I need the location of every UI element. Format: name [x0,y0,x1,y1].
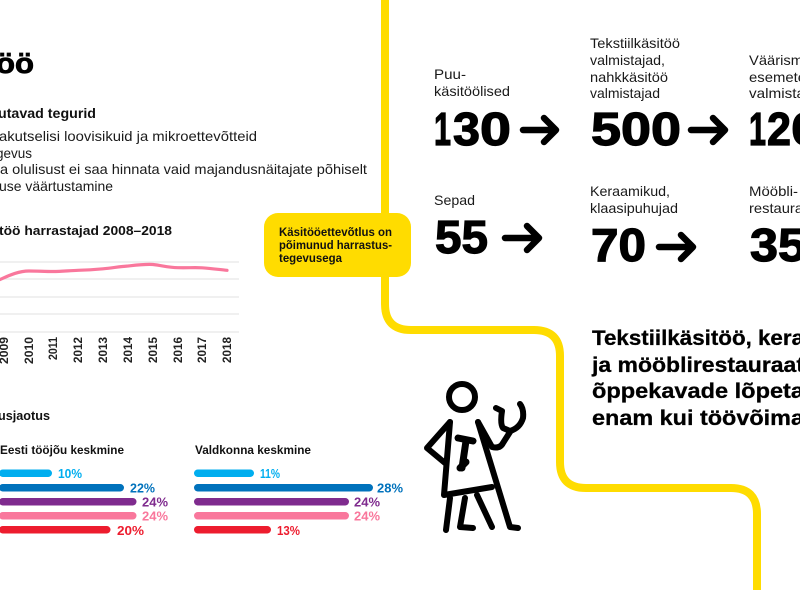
stat: textile and leather makers [590,35,681,155]
year axis labels: 2018 [222,336,234,363]
panel: line chart of hobbyists [0,223,239,364]
bar chart: Estonian workforce average: Eesti tööjõu keskmine [0,443,124,457]
stat: smiths [434,192,488,263]
stat: woodworkers: 3 [453,103,480,155]
stat: woodworkers [434,66,511,155]
arrow [505,226,539,250]
bar chart: Estonian workforce average: 20% [117,524,144,538]
stat: furniture restorers: 35 [750,219,800,271]
callout: põimunud harrastus- [279,240,392,252]
bar chart: sector average: 24% [354,510,380,524]
text block: conclusion [591,326,800,430]
arrow [523,118,556,142]
stat: furniture restorers [749,183,800,271]
callout: Käsitööettevõtlus on [279,227,392,239]
text block: conclusion: ja mööblirestauraat [591,353,800,377]
stat: precious metal makers: 2 [767,103,791,155]
stat: smiths: Sepad [434,192,475,208]
stat: precious metal makers: Väärism [749,52,800,68]
panel: influencing factors [0,106,367,194]
panel: distribution bars [0,408,403,538]
bar chart: Estonian workforce average: 24% [142,510,168,524]
text block: factors list [0,128,367,194]
text block: conclusion: õppekavade lõpeta [592,379,800,403]
text block: factors list: a olulisust ei saa hinnata vaid majandusnäitajate põhiselt [0,161,367,177]
year axis labels: 2014 [123,336,135,363]
stat: textile and leather makers: Tekstiilkäsitöö [590,35,680,51]
text block: conclusion: Tekstiilkäsitöö, kera [592,326,800,350]
bar chart: sector average: 13% [277,524,300,538]
heading: factors: utavad tegurid [0,106,96,121]
bar chart: sector average: 11% [260,467,280,481]
callout: tegevusega [279,253,343,265]
bar chart: Estonian workforce average: 24% [142,496,168,510]
arrow [659,235,693,259]
callout [264,213,411,277]
bar chart: sector average: Valdkonna keskmine [195,443,311,457]
stat: woodworkers: 0 [480,103,511,155]
stat: furniture restorers: restaura [749,200,800,216]
arrow [691,118,725,142]
year axis labels: 2011 [48,336,60,360]
year axis labels: 2012 [73,337,85,363]
stat: precious metal makers: 1 [749,103,766,155]
year axis labels: 2017 [197,337,209,363]
stat: precious metal makers [749,52,800,155]
stat: textile and leather makers: nahkkäsitöö [590,69,668,85]
bar chart: Estonian workforce average: 22% [130,482,155,496]
stat: furniture restorers: Mööbli- [749,183,798,199]
text block: factors list: use väärtustamine [0,178,113,194]
stat: ceramists and glassblowers: 70 [591,219,646,271]
text block: conclusion: enam kui töövõima [592,406,800,430]
icon: craftsperson with lyre and hammer [427,384,523,530]
year axis labels [0,336,234,364]
bar chart: sector average: 24% [354,496,380,510]
year axis labels: 2015 [148,336,160,363]
chart heading: töö harrastajad 2008–2018 [0,223,172,238]
stat: textile and leather makers: valmistajad [590,85,660,101]
stat: precious metal makers: valmista [749,85,800,101]
stat: textile and leather makers: 500 [591,103,681,155]
stat: woodworkers: 1 [434,103,451,155]
stat: textile and leather makers: valmistajad, [590,52,665,68]
stat: ceramists and glassblowers: klaasipuhujad [590,200,678,216]
bar chart: sector average: 28% [377,482,403,496]
stat: woodworkers: Puu- [434,66,466,82]
text block: factors list: akutselisi loovisikuid ja mikroettevõtteid [0,128,257,144]
stat: woodworkers: käsitöölised [434,83,510,99]
year axis labels: 2010 [24,337,36,364]
year axis labels: 2016 [173,337,185,363]
bar chart: Estonian workforce average [0,443,168,538]
stat: smiths: 55 [435,211,488,263]
pink trend line [0,264,227,280]
stat: ceramists and glassblowers [590,183,678,271]
year axis labels: 2013 [98,337,110,363]
bar chart: Estonian workforce average: 10% [58,467,82,481]
stat: ceramists and glassblowers: Keraamikud, [590,183,670,199]
bar chart: sector average [194,443,403,538]
yellow timeline path [385,0,757,590]
